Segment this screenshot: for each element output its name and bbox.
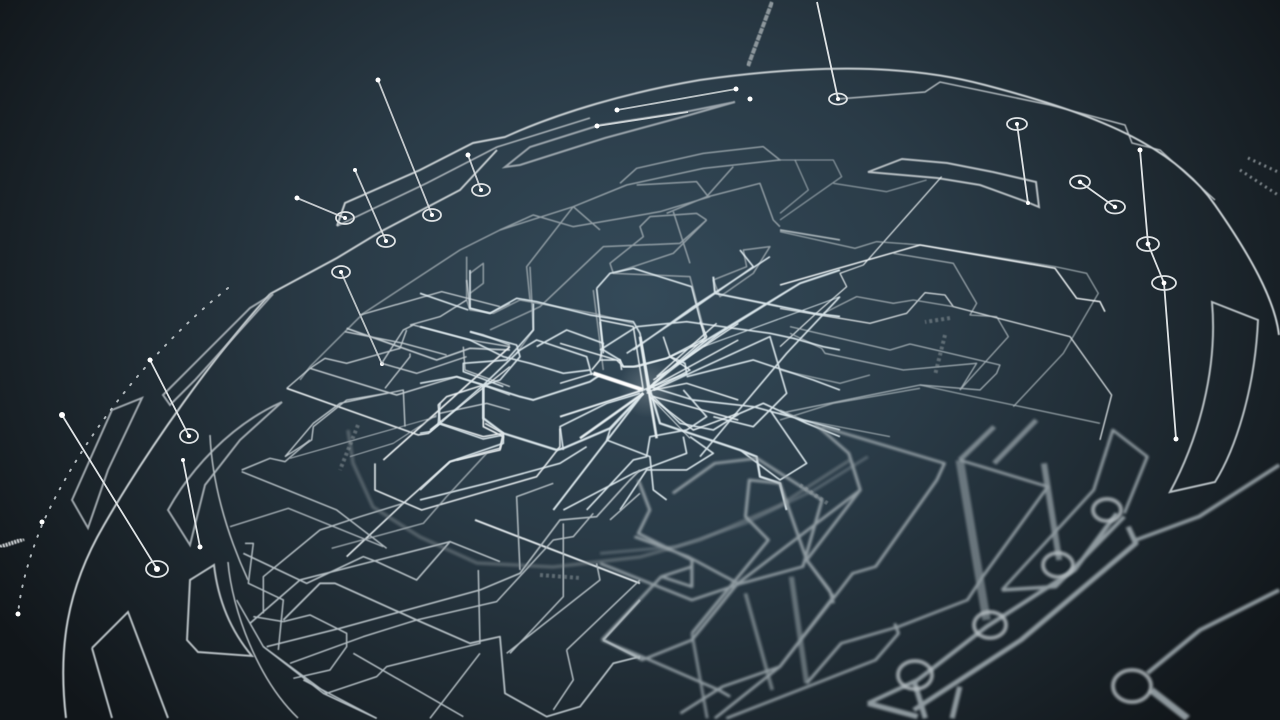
pins and nodes [62, 2, 1176, 577]
segmented frame panels [72, 102, 1258, 718]
ring nodes [146, 94, 1176, 577]
hub circuit layer [560, 320, 738, 438]
lower-left circuit layer [230, 423, 640, 718]
hot centre glow [618, 358, 678, 418]
dotted left arc [18, 288, 228, 615]
top blurred dash [748, 2, 772, 66]
panel segment: top centre [505, 102, 735, 167]
panel segment: left arc [168, 402, 282, 545]
panel segment: top right [868, 159, 1039, 207]
left circuit layer [285, 280, 510, 460]
foreground blurred rings [898, 499, 1151, 702]
top right cluster [1240, 158, 1278, 195]
faint blurred inner arc [348, 430, 850, 567]
panel segment: left upper [163, 294, 273, 405]
panel segment: bottom left [92, 612, 168, 718]
panel segment: right [1170, 302, 1258, 492]
central bright circuit layer [420, 250, 840, 510]
panel segment: lower left [187, 565, 252, 656]
node dots [16, 78, 1178, 616]
right circuit layer [780, 160, 1112, 440]
panel segment: left middle [72, 398, 142, 528]
blurred inner ticks [340, 318, 950, 578]
foreground blurred circuit layer [600, 420, 1279, 718]
left edge dash [0, 539, 24, 547]
upper circuit layer [300, 147, 780, 380]
